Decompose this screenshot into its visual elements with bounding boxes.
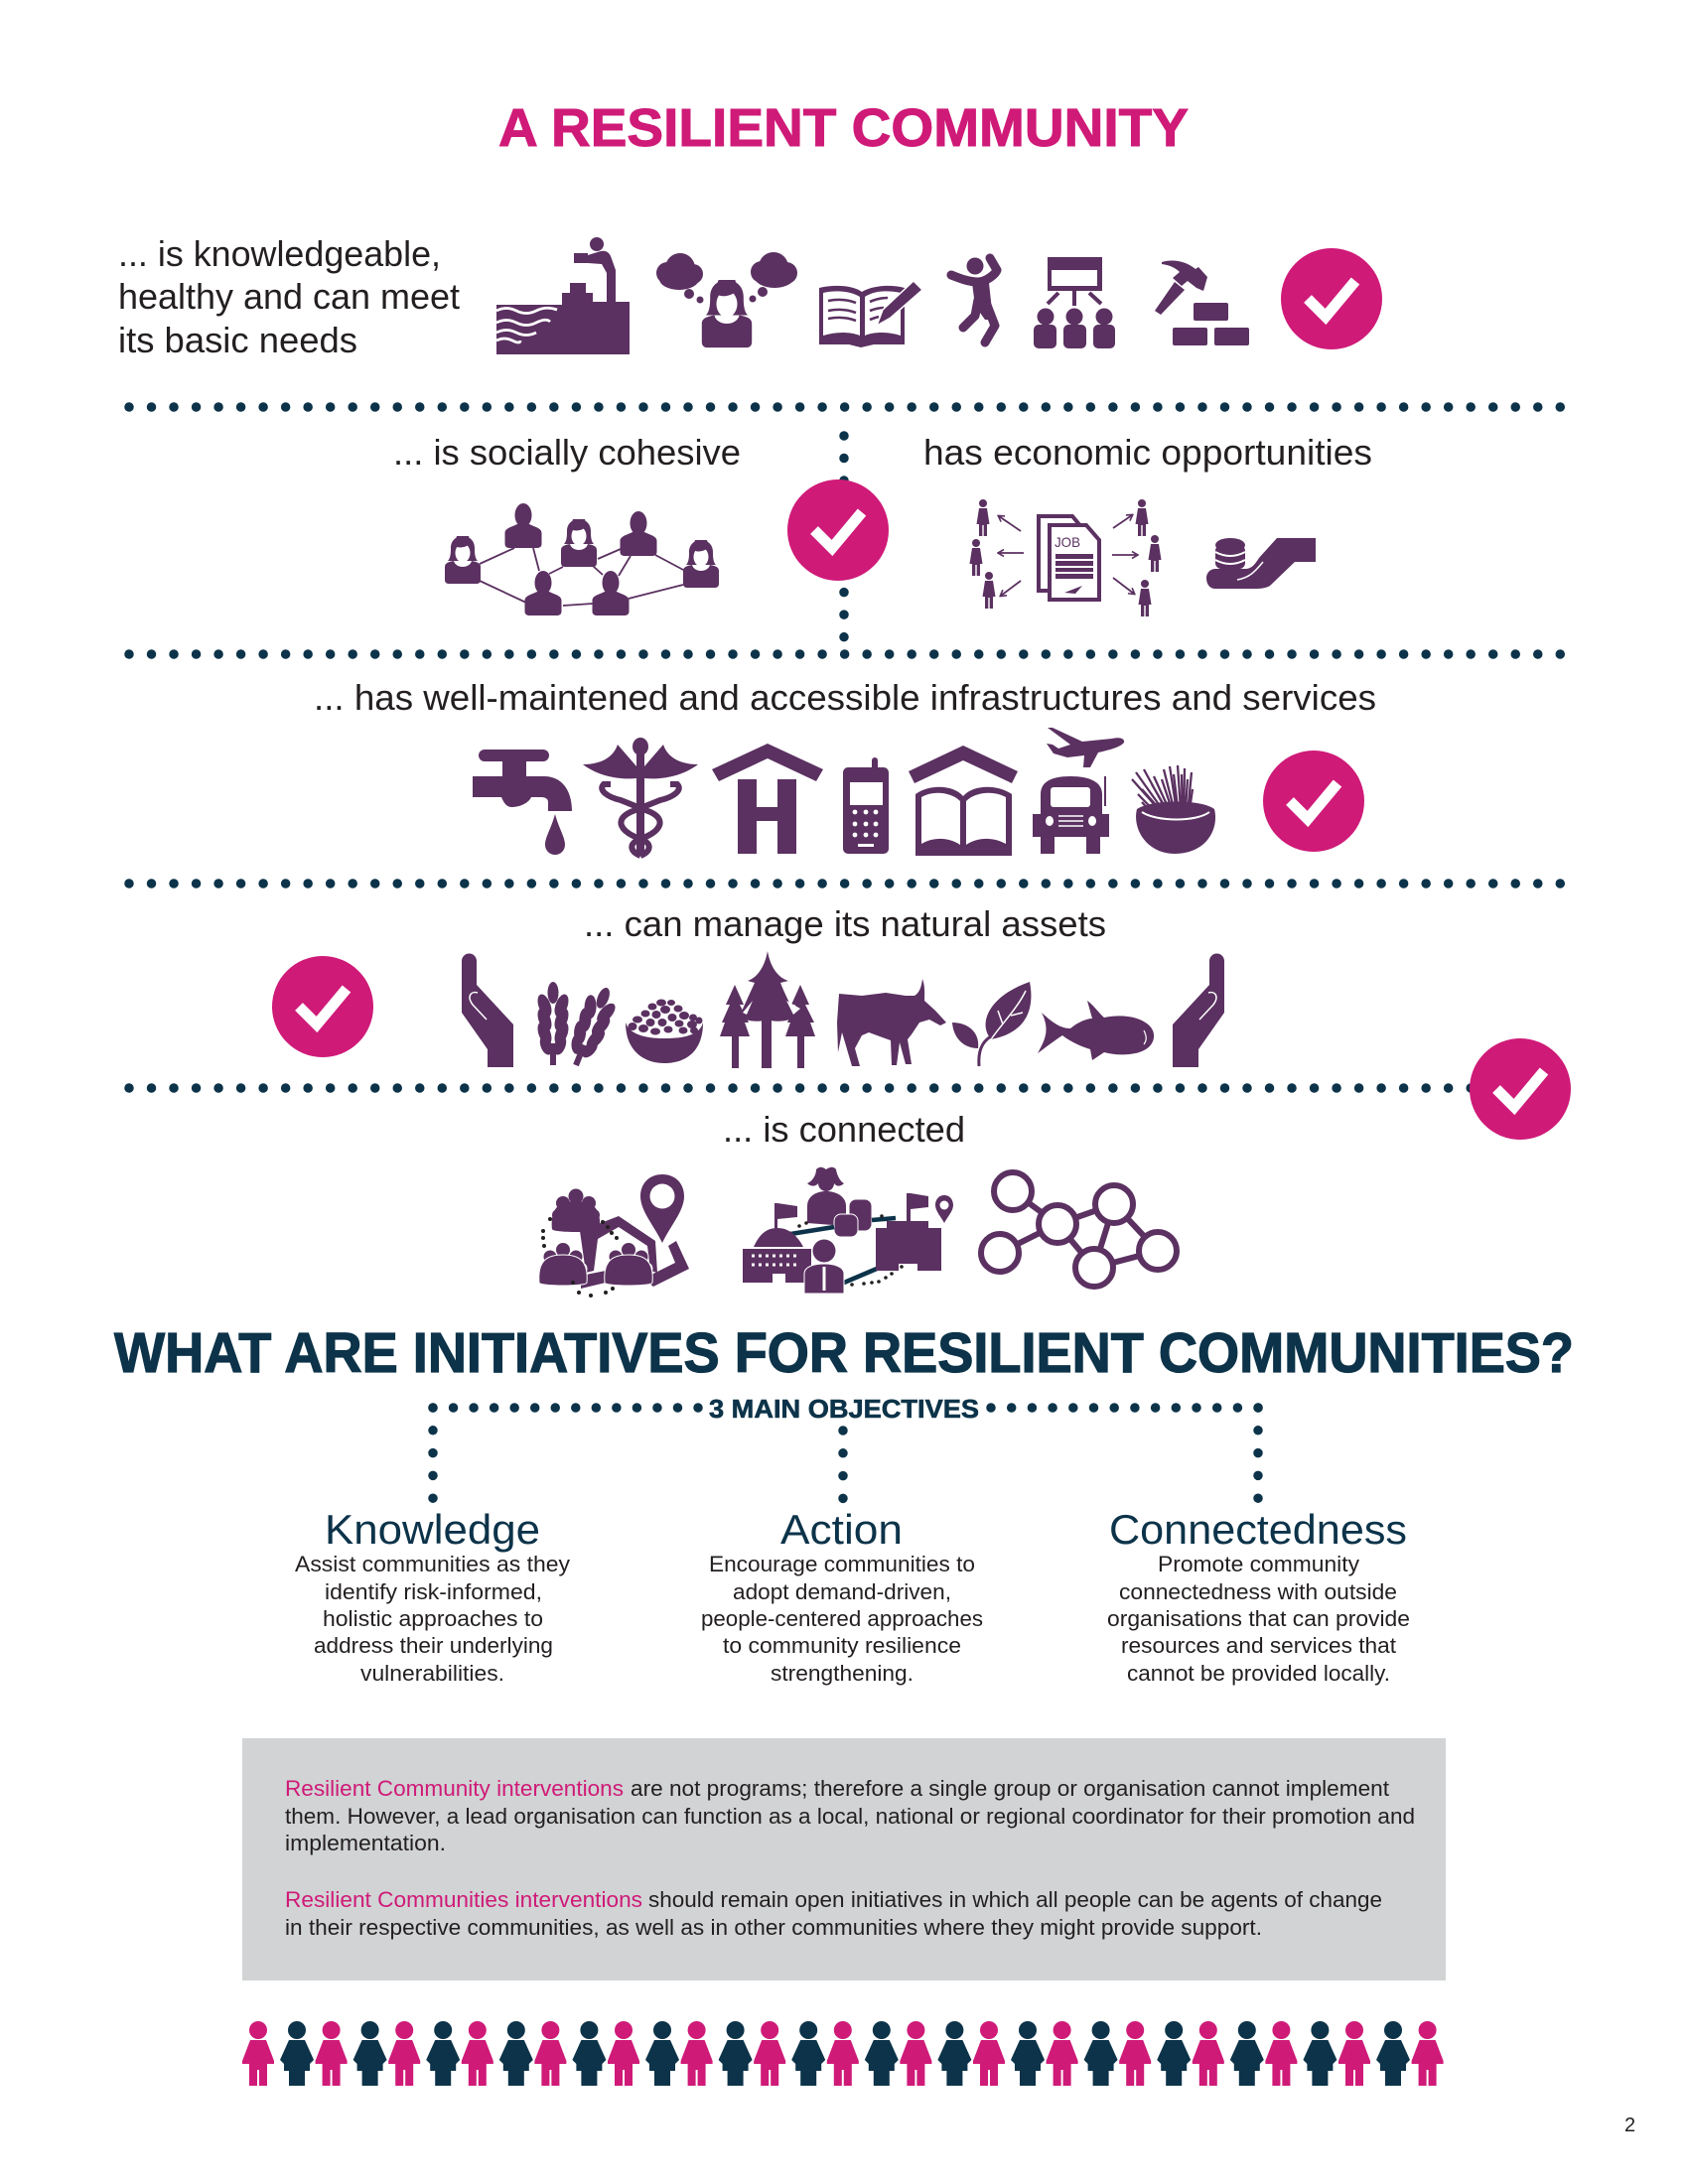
column: connectedness: resources and services that [1121, 1633, 1396, 1658]
title: A RESILIENT COMMUNITY [498, 98, 1189, 158]
icon: organisations exchanging resources [743, 1167, 953, 1294]
column: knowledge: vulnerabilities. [360, 1661, 504, 1686]
divider [129, 649, 1564, 659]
paragraph 1: them. However, a lead organisation can function as a local, national or regional coordinator for their promotion and [285, 1804, 1415, 1829]
icon: open book and pencil [819, 281, 922, 347]
icon: right hand [1173, 954, 1224, 1067]
icon: check mark [1281, 248, 1382, 349]
dotted connector [433, 1408, 1259, 1501]
column: connectedness: Connectedness [1109, 1506, 1407, 1553]
icon: social network of people [445, 503, 719, 615]
column: knowledge: Knowledge [325, 1506, 540, 1553]
divider [129, 1083, 1489, 1093]
column: action: strengthening. [771, 1661, 914, 1686]
panel: connected [539, 1109, 1177, 1297]
heading: economic opportunities: has economic opportunities [923, 432, 1372, 473]
icon: water tap [473, 750, 572, 855]
panel: infrastructures and services [314, 677, 1376, 856]
column: action [701, 1506, 983, 1686]
icon: wheat [535, 981, 624, 1072]
column: action: to community resilience [723, 1633, 961, 1658]
icon: fish [1038, 1001, 1154, 1060]
paragraph 2 [285, 1887, 1382, 1940]
heading: natural assets: ... can manage its natural assets [584, 903, 1106, 944]
icon: truck [1033, 776, 1109, 854]
icon: communities on a map [539, 1174, 689, 1297]
panel: socially cohesive and economic opportunities [393, 432, 1372, 640]
column: connectedness: cannot be provided locally. [1127, 1661, 1390, 1686]
column: knowledge: Assist communities as they [295, 1552, 570, 1576]
heading: infrastructures: ... has well-maintened and accessible infrastructures and services [314, 677, 1376, 718]
text block: row 1 [118, 233, 460, 360]
icon: hand holding coins [1206, 538, 1316, 589]
column: action: adopt demand-driven, [733, 1579, 951, 1604]
paragraph 1: are not programs; therefore a single group or organisation cannot implement [631, 1776, 1389, 1801]
icon: jumping person [951, 258, 997, 342]
paragraph 1: Resilient Community interventions [285, 1776, 624, 1801]
panel: 3 main objectives [295, 1394, 1410, 1686]
paragraph 1: implementation. [285, 1831, 446, 1855]
page number: 2 [1624, 2115, 1635, 2136]
panel: natural assets [272, 903, 1224, 1072]
divider [129, 402, 1564, 412]
icon: school with open book [909, 746, 1018, 856]
column: knowledge: address their underlying [314, 1633, 553, 1658]
icon: trees [720, 951, 815, 1068]
icon: job document and job seekers [969, 499, 1162, 616]
icon: leaves [952, 982, 1031, 1066]
column: connectedness: Promote community [1158, 1552, 1359, 1576]
check mark [1263, 751, 1364, 852]
icon: job document and job seekers: JOB [1055, 534, 1080, 550]
icon: person on stairs above water [496, 237, 630, 354]
heading: socially cohesive: ... is socially cohesive [393, 432, 741, 473]
column: action: Action [780, 1506, 903, 1553]
vertical dotted divider [839, 436, 849, 640]
icon: bowl of grain [1132, 765, 1215, 854]
check mark [787, 479, 889, 581]
panel: knowledgeable, healthy, basic needs [118, 233, 1382, 360]
icon: cow [837, 979, 946, 1066]
column: action: Encourage communities to [709, 1552, 975, 1576]
paragraph 2: should remain open initiatives in which all people can be agents of change [648, 1887, 1382, 1912]
text block: row 1: ... is knowledgeable, [118, 233, 441, 274]
heading: connected: ... is connected [723, 1109, 965, 1150]
icon: woman thinking [656, 252, 797, 347]
icon: hammer and bricks [1155, 260, 1249, 345]
column: connectedness: organisations that can provide [1107, 1606, 1410, 1631]
column: knowledge: holistic approaches to [323, 1606, 543, 1631]
subheading: 3 MAIN OBJECTIVES [709, 1394, 979, 1424]
icon: presentation board and audience [1034, 257, 1115, 348]
icon: network of nodes [981, 1172, 1177, 1287]
icon: airplane [1047, 728, 1124, 767]
text block: row 1: healthy and can meet [118, 276, 460, 317]
heading: initiatives: WHAT ARE INITIATIVES FOR RESILIENT COMMUNITIES? [114, 1321, 1574, 1385]
divider [129, 879, 1564, 888]
icon: hospital [712, 744, 823, 854]
row of people [242, 2021, 1444, 2086]
icon: left hand [462, 954, 513, 1067]
paragraph 1 [285, 1776, 1415, 1855]
icon: caduceus [583, 738, 698, 856]
icon: mobile phone [843, 757, 889, 854]
callout: grey notes panel [242, 1738, 1446, 1980]
paragraph 2: Resilient Communities interventions [285, 1887, 642, 1912]
column: connectedness: connectedness with outside [1119, 1579, 1397, 1604]
column: knowledge [295, 1506, 570, 1686]
text block: row 1: its basic needs [118, 320, 357, 360]
column: connectedness [1107, 1506, 1410, 1686]
check mark [1470, 1038, 1571, 1140]
paragraph 2: in their respective communities, as well as in other communities where they might provide support. [285, 1915, 1262, 1940]
column: action: people-centered approaches [701, 1606, 983, 1631]
icon: bowl of beans [626, 999, 703, 1063]
check mark [272, 956, 373, 1057]
column: knowledge: identify risk-informed, [325, 1579, 542, 1604]
